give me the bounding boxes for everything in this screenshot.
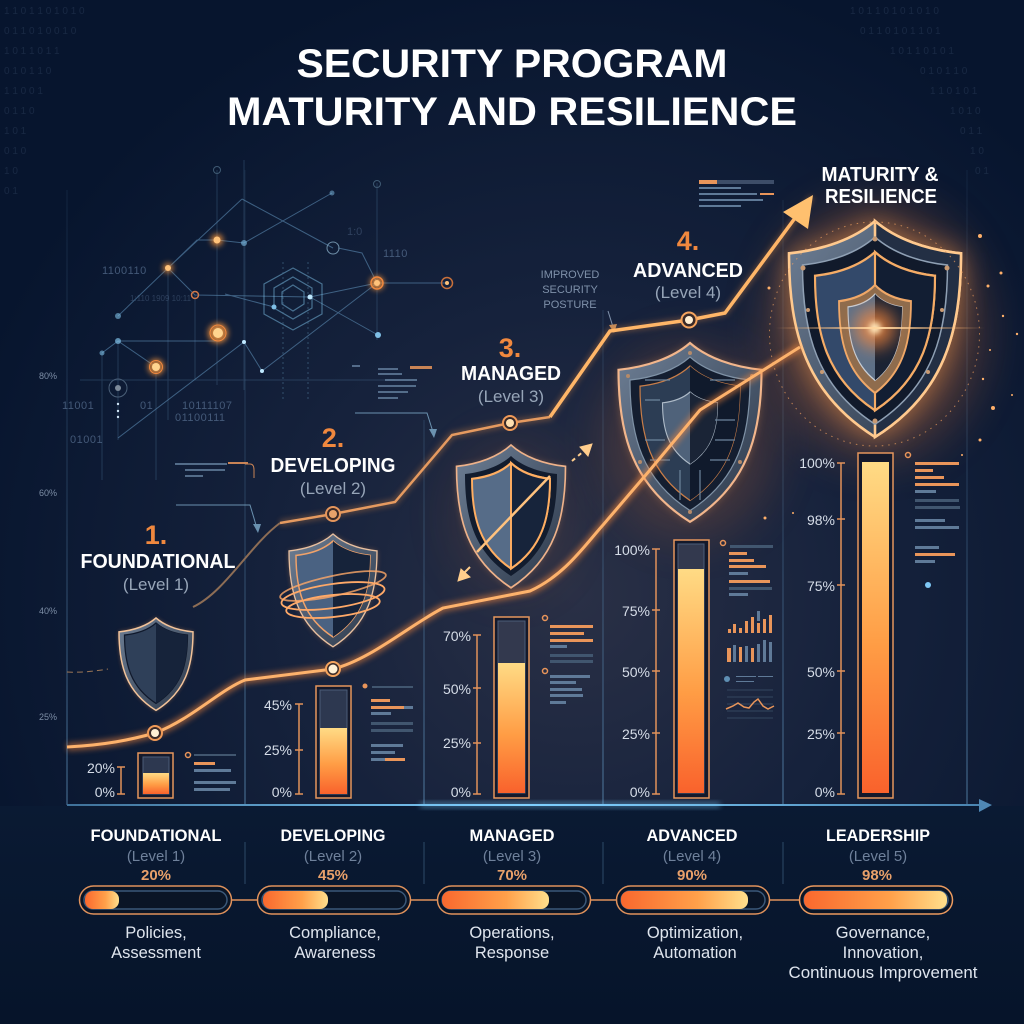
- network binary labels: 01001: [70, 434, 103, 446]
- shield level 2: [278, 534, 388, 647]
- improved security posture note: POSTURE: [543, 299, 597, 311]
- binary pattern: top corners: 0 1 0 1 1 0: [920, 66, 968, 77]
- orbit rings: [278, 565, 388, 622]
- heading: level 1: FOUNDATIONAL: [80, 551, 236, 573]
- scale: 0%: [451, 784, 471, 800]
- stage: foundational: Policies,: [125, 924, 187, 942]
- scale: 98%: [807, 512, 835, 528]
- readouts: [906, 452, 960, 563]
- stage: advanced: 90%: [677, 867, 707, 884]
- heading: level 2: 2.: [322, 423, 344, 453]
- stage: managed: Response: [475, 944, 549, 962]
- stage: leadership: [788, 826, 978, 982]
- network binary labels: 1100110: [102, 265, 147, 277]
- scale: [87, 760, 125, 800]
- stage: managed: (Level 3): [483, 848, 541, 865]
- binary pattern: top corners: 1 1 0 1 1 0 1 0 1 0: [4, 6, 85, 17]
- improved security posture note: [541, 269, 617, 333]
- stage: managed: Operations,: [469, 924, 555, 942]
- binary pattern: top corners: 0 1: [4, 186, 18, 197]
- upper line nodes: [326, 312, 696, 521]
- rivets: [800, 236, 950, 424]
- stage: advanced: [616, 826, 770, 962]
- scale: 45%: [264, 697, 292, 713]
- binary pattern: top corners: 1 1 0 1 0 1: [930, 86, 978, 97]
- readouts: [720, 540, 773, 596]
- scale: 75%: [807, 578, 835, 594]
- scale: 50%: [622, 664, 650, 680]
- bar level 3: [443, 616, 593, 800]
- scale: 20%: [87, 760, 115, 776]
- binary pattern: top corners: 1 0: [4, 166, 18, 177]
- progress pill: [258, 886, 410, 914]
- network binary labels: 1:110 1909 10:11: [130, 294, 192, 303]
- stage: leadership: Continuous Improvement: [788, 964, 978, 982]
- scale: 25%: [622, 726, 650, 742]
- scale: 0%: [815, 784, 835, 800]
- title: SECURITY PROGRAM: [296, 42, 728, 86]
- stage: foundational: FOUNDATIONAL: [90, 826, 222, 845]
- stage: foundational: Assessment: [111, 944, 201, 962]
- scale: 100%: [799, 455, 835, 471]
- stage: leadership: Governance,: [836, 924, 930, 942]
- progress pill: [438, 886, 590, 914]
- heading: level 1: 1.: [145, 520, 167, 550]
- snippet: level 1 callout: [175, 462, 261, 533]
- readouts: [542, 616, 593, 704]
- scale: 50%: [807, 664, 835, 680]
- binary pattern: top corners: 1 0: [970, 146, 984, 157]
- binary pattern: top corners: 0 1 1 0: [4, 106, 35, 117]
- circuit traces: [645, 380, 735, 500]
- core flare: [775, 308, 985, 348]
- shield level 4: [618, 343, 762, 522]
- bottom band background: [0, 806, 1024, 1024]
- scale: 25%: [807, 726, 835, 742]
- pill connectors: [232, 899, 799, 901]
- network binary labels: 01: [140, 400, 153, 412]
- stage: advanced: Optimization,: [647, 924, 743, 942]
- binary pattern: top corners: 0 1 0: [4, 146, 27, 157]
- data text snippets: upper: [67, 180, 774, 672]
- heading: level 3: [461, 333, 561, 406]
- stage: advanced: (Level 4): [663, 848, 721, 865]
- network glow nodes: [148, 234, 384, 375]
- left axis percent labels: [39, 371, 57, 722]
- scale: 0%: [630, 784, 650, 800]
- x axis: [67, 799, 992, 812]
- bar level 4: [614, 540, 774, 800]
- bar level 5: [799, 452, 960, 800]
- left axis percent labels: 25%: [39, 712, 57, 722]
- binary pattern: top corners: [4, 6, 989, 197]
- scale: 0%: [272, 784, 292, 800]
- bottom separators: [245, 842, 783, 884]
- network binary labels: 01100111: [175, 412, 226, 424]
- binary pattern: top corners: 0 1: [975, 166, 989, 177]
- stage: developing: 45%: [318, 867, 348, 884]
- heading: level 3: MANAGED: [461, 363, 561, 385]
- scale: 25%: [443, 735, 471, 751]
- scale: [443, 628, 481, 800]
- stage: advanced: ADVANCED: [646, 826, 738, 845]
- scale: 75%: [622, 603, 650, 619]
- stage: leadership: 98%: [862, 867, 892, 884]
- rivets: [626, 351, 754, 514]
- scale: [264, 697, 303, 800]
- arrow head: [783, 195, 813, 229]
- stage: developing: Compliance,: [289, 924, 381, 942]
- scale: 0%: [95, 784, 115, 800]
- progress pill: [800, 886, 952, 914]
- heading: level 2: [270, 423, 396, 498]
- network binary labels: 11001: [62, 400, 94, 412]
- glow behind top shields: [451, 205, 980, 590]
- heading: maturity and resilience: MATURITY &: [822, 164, 938, 186]
- improved security posture note: SECURITY: [542, 284, 598, 296]
- scale: 50%: [443, 681, 471, 697]
- scale: [799, 455, 845, 800]
- network nodes: [100, 166, 452, 418]
- heading: level 4: 4.: [677, 226, 699, 256]
- network binary labels: [62, 226, 408, 446]
- heading: level 4: [633, 226, 743, 302]
- stage: foundational: (Level 1): [127, 848, 185, 865]
- stage: managed: [438, 826, 590, 962]
- dashed trace: [67, 669, 108, 672]
- bar level 2: [264, 684, 413, 800]
- binary pattern: top corners: 1 0 1: [4, 126, 27, 137]
- heading: level 3: 3.: [499, 333, 521, 363]
- binary pattern: top corners: 1 0 1 1 0 1 0 1: [890, 46, 954, 57]
- left axis percent labels: 60%: [39, 488, 57, 498]
- binary pattern: top corners: 1 0 1 1 0 1 0 1 0 1 0: [850, 6, 939, 17]
- mini bar charts: [727, 611, 772, 662]
- scale: 70%: [443, 628, 471, 644]
- left axis percent labels: 40%: [39, 606, 57, 616]
- network binary labels: 1:0: [347, 226, 362, 238]
- network binary labels: 1110: [383, 248, 408, 260]
- stage: leadership: (Level 5): [849, 848, 907, 865]
- slash beam and arrows: [477, 476, 550, 552]
- binary pattern: top corners: 1 0 1 1 0 1 1: [4, 46, 60, 57]
- shield level 1: [119, 618, 193, 710]
- binary pattern: top corners: 0 1 1: [960, 126, 983, 137]
- network diagram: [62, 160, 452, 480]
- network binary labels: 10111107: [182, 400, 232, 412]
- stage: managed: 70%: [497, 867, 527, 884]
- shield level 5: [770, 221, 985, 446]
- shield level 3: [456, 444, 592, 588]
- left axis percent labels: 80%: [39, 371, 57, 381]
- heading: maturity and resilience: RESILIENCE: [825, 186, 937, 208]
- heading: level 3: (Level 3): [478, 387, 544, 406]
- hexagon core: [264, 262, 322, 400]
- binary pattern: top corners: 1 0 1 0: [950, 106, 981, 117]
- stage: developing: [258, 826, 410, 962]
- scale: 100%: [614, 542, 650, 558]
- binary pattern: top corners: 0 1 1 0 1 0 0 1 0: [4, 26, 77, 37]
- upper progress line: [193, 195, 813, 607]
- bar level 1: [87, 752, 236, 800]
- snippet: level 4 top: [699, 180, 774, 207]
- chart column dividers: [67, 170, 967, 805]
- stage: foundational: [80, 826, 232, 962]
- improved security posture note: IMPROVED: [541, 269, 599, 281]
- stage: leadership: Innovation,: [843, 944, 923, 962]
- scale: 25%: [264, 742, 292, 758]
- binary pattern: top corners: 0 1 0 1 1 0: [4, 66, 52, 77]
- stage: leadership: LEADERSHIP: [826, 826, 930, 845]
- heading: level 1: [80, 520, 236, 594]
- readouts: [362, 684, 413, 761]
- heading: level 4: (Level 4): [655, 283, 721, 302]
- stage: foundational: 20%: [141, 867, 171, 884]
- heading: level 4: ADVANCED: [633, 260, 743, 282]
- progress pill: [616, 886, 770, 914]
- stage: developing: DEVELOPING: [280, 826, 386, 845]
- binary pattern: top corners: 1 1 0 0 1: [4, 86, 43, 97]
- sparkle particles: [764, 234, 1018, 588]
- snippet: level 2 callout: [352, 365, 437, 438]
- readouts: [186, 752, 236, 791]
- binary pattern: top corners: 0 1 1 0 1 0 1 1 0 1: [860, 26, 941, 37]
- stage: managed: MANAGED: [470, 826, 554, 845]
- title: MATURITY AND RESILIENCE: [227, 90, 797, 134]
- title: [227, 42, 797, 134]
- stage: developing: Awareness: [294, 944, 376, 962]
- mini line chart: [724, 676, 774, 718]
- heading: level 1: (Level 1): [123, 575, 189, 594]
- lower progress line: [67, 347, 800, 747]
- heading: level 2: (Level 2): [300, 479, 366, 498]
- progress pill: [80, 886, 232, 914]
- lower line nodes: [148, 662, 340, 740]
- heading: maturity and resilience: [822, 164, 938, 208]
- scale: [614, 542, 660, 800]
- stage: advanced: Automation: [653, 944, 737, 962]
- heading: level 2: DEVELOPING: [270, 455, 396, 477]
- stage: developing: (Level 2): [304, 848, 362, 865]
- halo dots: [770, 222, 980, 446]
